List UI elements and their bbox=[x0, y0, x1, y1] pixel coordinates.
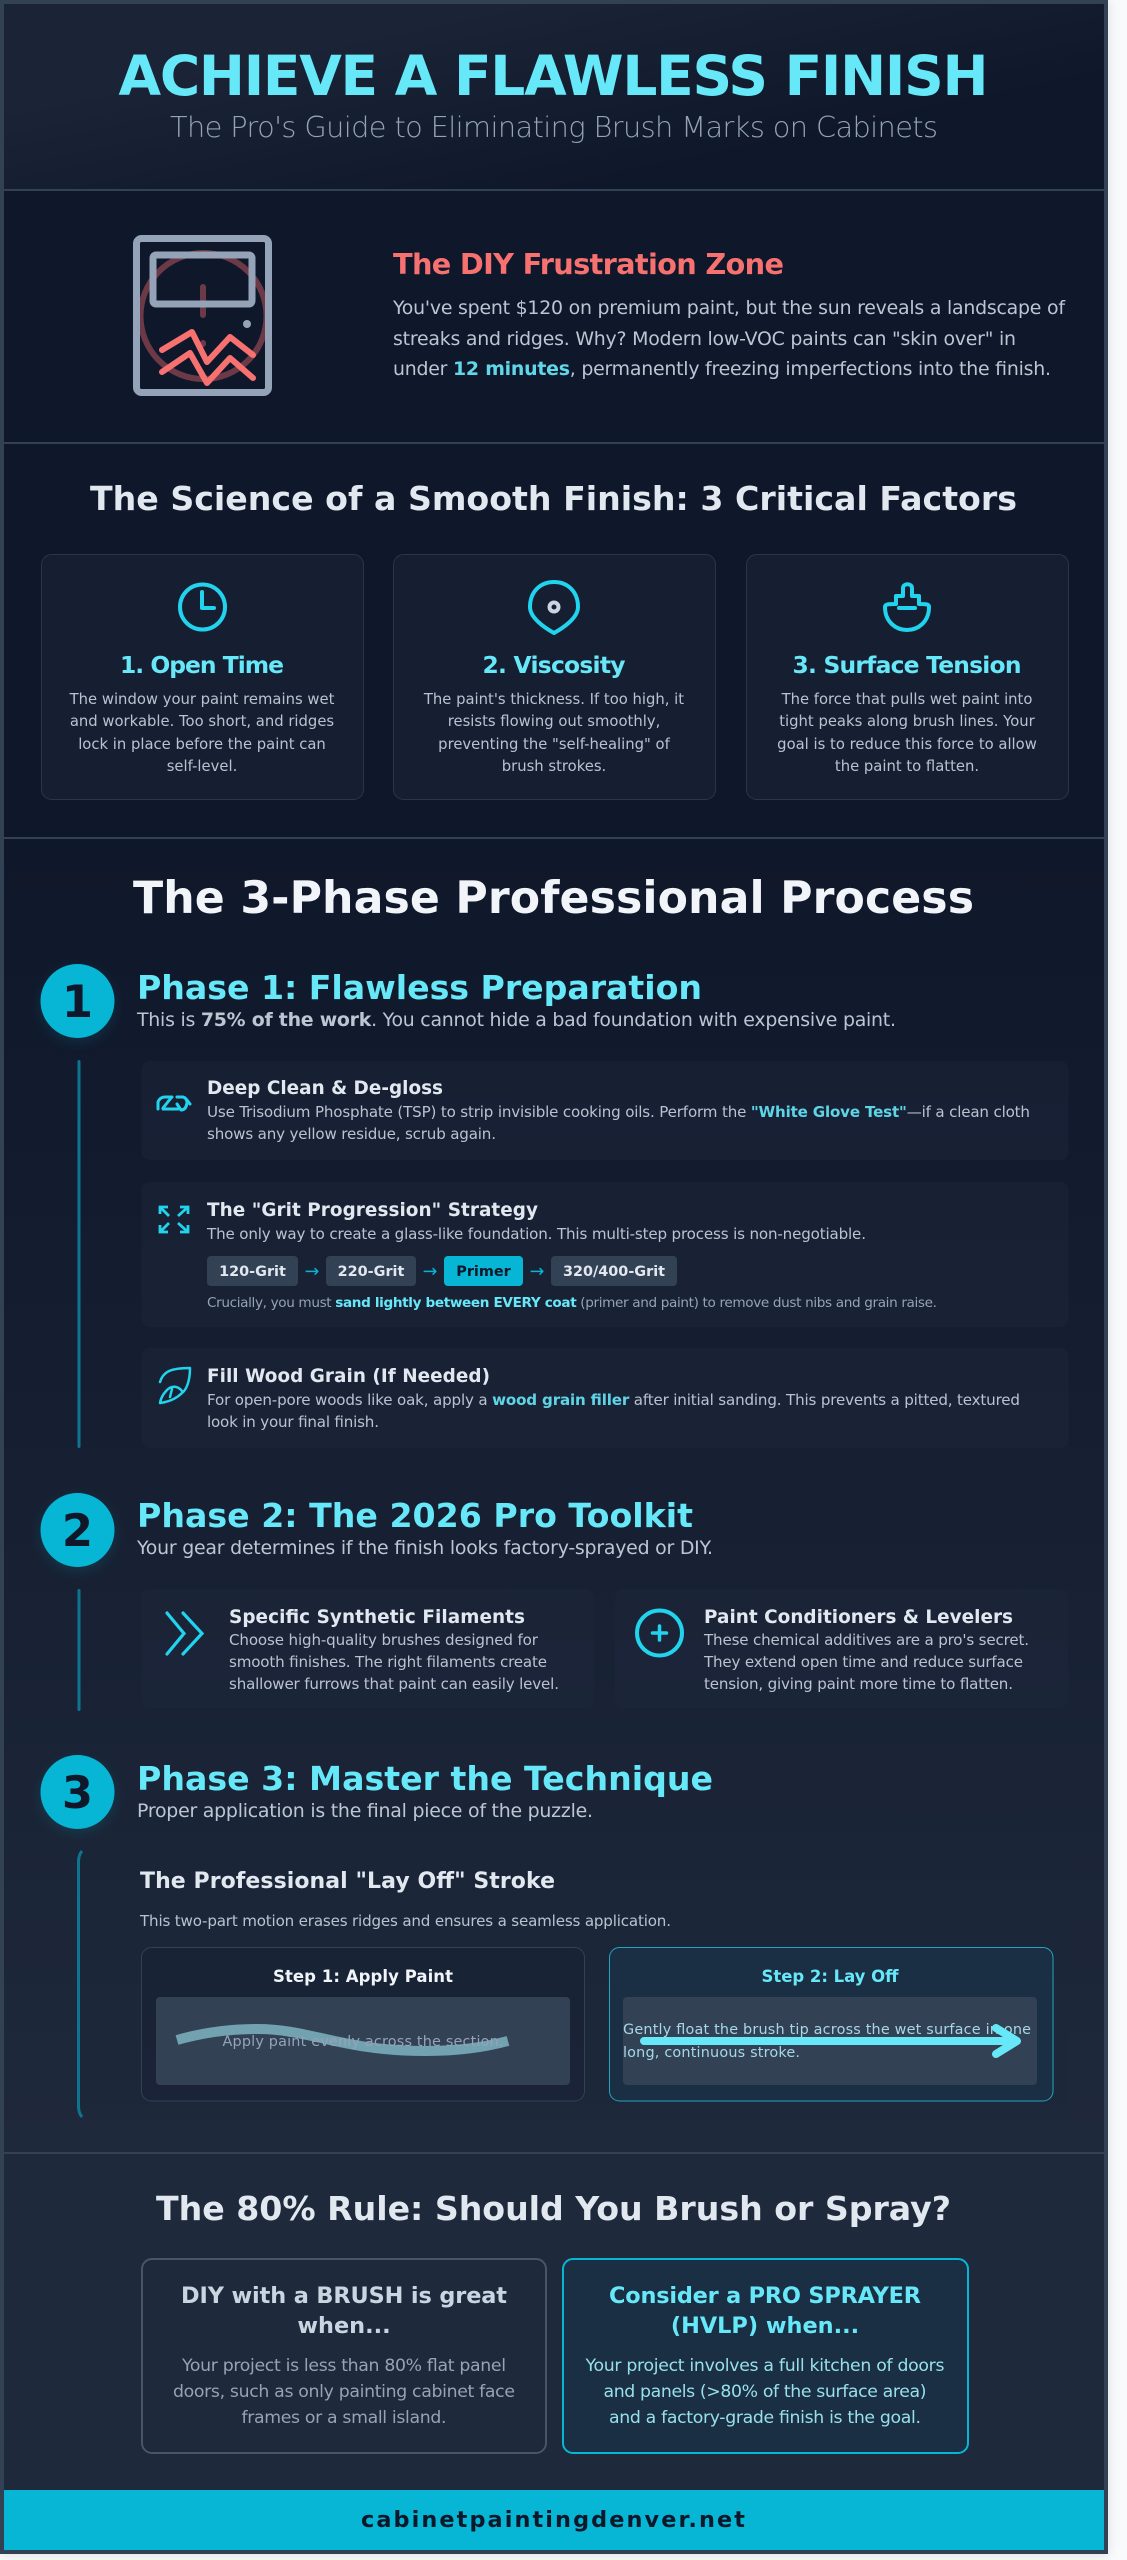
card: sprayer bbox=[563, 2259, 968, 2453]
tool: synthetic filaments: Choose high-quality brushes designed for bbox=[229, 1631, 539, 1649]
card: open time bbox=[42, 554, 364, 800]
card text: resists flowing out smoothly, bbox=[448, 713, 660, 730]
step: grit progression: The "Grit Progression" Strategy bbox=[207, 1200, 538, 1221]
arrow bbox=[644, 2028, 1017, 2054]
card: sprayer: and a factory-grade finish is the goal. bbox=[609, 2408, 921, 2428]
footer bbox=[4, 2490, 1104, 2550]
card: brush: frames or a small island. bbox=[242, 2408, 446, 2428]
grit chips: 320/400-Grit bbox=[563, 1264, 665, 1280]
icon: drop bbox=[530, 582, 578, 633]
grit chips: → bbox=[530, 1262, 544, 1282]
tool: synthetic filaments: Specific Synthetic Filaments bbox=[229, 1607, 525, 1628]
card title: 1. Open Time bbox=[120, 651, 284, 679]
rule heading: The 80% Rule: Should You Brush or Spray? bbox=[156, 2189, 951, 2228]
step 2 box: long, continuous stroke. bbox=[623, 2045, 800, 2061]
card text: tight peaks along brush lines. Your bbox=[779, 713, 1036, 730]
phase 3 panel bbox=[78, 1851, 1068, 2117]
phase 3 header: Phase 3: Master the Technique bbox=[137, 1759, 713, 1798]
phase 1 header: This is 75% of the work. You cannot hide a bad foundation with expensive paint. bbox=[136, 1009, 896, 1031]
tool: paint conditioners: Paint Conditioners & Levelers bbox=[704, 1607, 1013, 1628]
phase 1 timeline bbox=[78, 1060, 80, 1448]
phase 1 header: 1 bbox=[62, 975, 93, 1028]
card text bbox=[423, 691, 684, 775]
step 1 box: Step 1: Apply Paint bbox=[273, 1967, 453, 1986]
step: grit progression: Crucially, you must sand lightly between EVERY coat (primer and paint) to remove dust nibs and grain raise. bbox=[207, 1295, 937, 1311]
step 1 box: Apply paint evenly across the section. bbox=[222, 2034, 504, 2050]
step: deep clean bbox=[142, 1061, 1068, 1160]
icon: leaf brush bbox=[160, 1368, 190, 1403]
icon: brush bbox=[885, 584, 929, 630]
card text: goal is to reduce this force to allow bbox=[777, 736, 1037, 753]
footer: cabinetpaintingdenver.net bbox=[361, 2507, 745, 2533]
phase 2 header: Phase 2: The 2026 Pro Toolkit bbox=[137, 1496, 693, 1535]
lay off heading: The Professional "Lay Off" Stroke bbox=[140, 1869, 555, 1894]
card: surface tension bbox=[746, 554, 1068, 800]
card text: preventing the "self-healing" of bbox=[438, 736, 671, 753]
card: sprayer: Your project involves a full kitchen of doors bbox=[584, 2356, 944, 2376]
tool: paint conditioners: These chemical additives are a pro's secret. bbox=[703, 1631, 1029, 1649]
step: fill wood grain bbox=[142, 1348, 1068, 1448]
card text: lock in place before the paint can bbox=[78, 736, 326, 753]
tool: paint conditioners: They extend open time and reduce surface bbox=[703, 1653, 1023, 1671]
tool: paint conditioners bbox=[615, 1589, 1068, 1708]
card: sprayer: and panels (>80% of the surface area) bbox=[604, 2382, 926, 2402]
science heading: The Science of a Smooth Finish: 3 Critical Factors bbox=[90, 479, 1017, 518]
card: brush: Your project is less than 80% flat panel bbox=[181, 2356, 506, 2376]
icon: chevrons bbox=[167, 1613, 202, 1654]
phase 2 header: 2 bbox=[62, 1504, 93, 1557]
card: brush bbox=[142, 2259, 546, 2453]
grit chips bbox=[207, 1256, 677, 1286]
card text: The force that pulls wet paint into bbox=[781, 691, 1032, 708]
frustration text bbox=[392, 297, 1066, 380]
card text bbox=[69, 691, 335, 775]
icon: cabinet with ridges bbox=[136, 238, 268, 392]
card: viscosity bbox=[394, 554, 716, 800]
step: grit progression: The only way to create a glass-like foundation. This multi-step process is non-negotiable. bbox=[206, 1225, 866, 1243]
step: deep clean: Use Trisodium Phosphate (TSP) to strip invisible cooking oils. Perform the "White Glove Test"—if a clean cloth bbox=[207, 1103, 1030, 1121]
step: fill wood grain: look in your final finish. bbox=[207, 1413, 379, 1431]
card text: self-level. bbox=[167, 758, 237, 775]
step 2 box: Step 2: Lay Off bbox=[762, 1967, 899, 1986]
phase 2 header bbox=[40, 1493, 713, 1571]
tool: synthetic filaments: smooth finishes. The right filaments create bbox=[229, 1653, 547, 1671]
card text: The window your paint remains wet bbox=[69, 691, 335, 708]
section: DIY frustration zone bbox=[4, 191, 1104, 442]
icon: clock bbox=[180, 584, 225, 630]
card text: and workable. Too short, and ridges bbox=[70, 713, 334, 730]
tool: synthetic filaments bbox=[142, 1589, 594, 1708]
card text: the paint to flatten. bbox=[835, 758, 979, 775]
subtitle: The Pro's Guide to Eliminating Brush Marks on Cabinets bbox=[170, 110, 938, 144]
section: 80% rule bbox=[4, 2154, 1104, 2490]
step: grit progression bbox=[142, 1182, 1068, 1327]
card: sprayer: (HVLP) when... bbox=[671, 2313, 859, 2339]
phase 1 header: Phase 1: Flawless Preparation bbox=[137, 968, 702, 1007]
step: deep clean: shows any yellow residue, scrub again. bbox=[207, 1125, 496, 1143]
card: brush: doors, such as only painting cabinet face bbox=[173, 2382, 515, 2402]
card: brush: when... bbox=[297, 2313, 391, 2339]
grit chips: → bbox=[305, 1262, 319, 1282]
phase 1 header bbox=[40, 964, 896, 1042]
phase 2 header: Your gear determines if the finish looks factory-sprayed or DIY. bbox=[136, 1537, 713, 1559]
card text: The paint's thickness. If too high, it bbox=[423, 691, 684, 708]
frustration text: You've spent $120 on premium paint, but the sun reveals a landscape of bbox=[392, 297, 1066, 319]
frustration text: under 12 minutes, permanently freezing imperfections into the finish. bbox=[393, 358, 1051, 380]
card: sprayer: Consider a PRO SPRAYER bbox=[609, 2283, 921, 2309]
grit chips: 220-Grit bbox=[338, 1264, 404, 1280]
phase 3 header: 3 bbox=[62, 1766, 93, 1819]
card title: 2. Viscosity bbox=[482, 651, 626, 679]
icon: cleaning bbox=[158, 1097, 190, 1110]
step 1 box bbox=[142, 1948, 584, 2101]
card title: 3. Surface Tension bbox=[792, 651, 1022, 679]
process heading: The 3-Phase Professional Process bbox=[133, 873, 974, 924]
grit chips: → bbox=[423, 1262, 437, 1282]
card text bbox=[777, 691, 1037, 775]
card text: brush strokes. bbox=[502, 758, 606, 775]
icon: plus circle bbox=[637, 1610, 682, 1656]
paint wave bbox=[177, 2029, 508, 2051]
tool: synthetic filaments: shallower furrows that paint can easily level. bbox=[229, 1675, 559, 1693]
card: brush: DIY with a BRUSH is great bbox=[181, 2283, 507, 2309]
title: ACHIEVE A FLAWLESS FINISH bbox=[118, 44, 988, 108]
icon: expand arrows bbox=[160, 1207, 188, 1232]
section: science factors bbox=[4, 444, 1104, 837]
frustration heading: The DIY Frustration Zone bbox=[393, 247, 784, 281]
lay off text: This two-part motion erases ridges and ensures a seamless application. bbox=[139, 1912, 671, 1930]
step 2 box: Gently float the brush tip across the wet surface in one bbox=[623, 2022, 1031, 2038]
section: 3-phase process bbox=[4, 839, 1104, 2152]
step 2 box bbox=[610, 1948, 1053, 2101]
frustration text: streaks and ridges. Why? Modern low-VOC paints can "skin over" in bbox=[393, 328, 1016, 350]
phase 3 header bbox=[40, 1755, 713, 1833]
grit chips: 120-Grit bbox=[219, 1264, 286, 1280]
phase 3 header: Proper application is the final piece of the puzzle. bbox=[137, 1800, 593, 1822]
grit chips: Primer bbox=[456, 1264, 512, 1280]
tool: paint conditioners: tension, giving paint more time to flatten. bbox=[704, 1675, 1013, 1693]
phase 2 timeline bbox=[78, 1589, 80, 1711]
step: fill wood grain: For open-pore woods like oak, apply a wood grain filler after initial sanding. This prevents a pitted, textured bbox=[207, 1391, 1020, 1409]
step: fill wood grain: Fill Wood Grain (If Needed) bbox=[207, 1366, 490, 1387]
header bbox=[4, 4, 1104, 189]
step: deep clean: Deep Clean & De-gloss bbox=[207, 1078, 443, 1099]
